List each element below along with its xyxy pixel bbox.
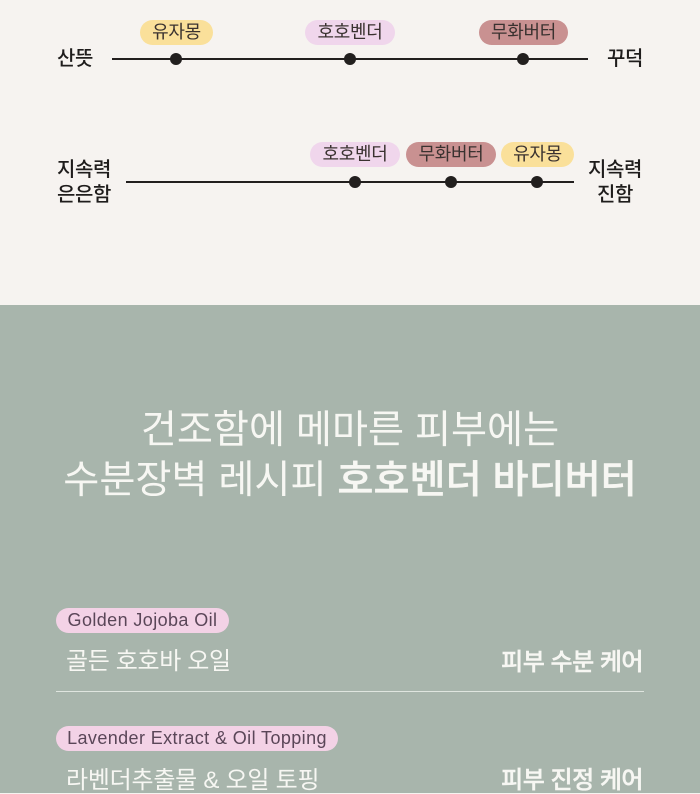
pill: yuja: 유자몽 [152, 22, 201, 42]
label: subtle longevity [57, 159, 111, 206]
tag [56, 608, 229, 633]
panel: scale charts [0, 0, 700, 305]
marker: fig [517, 53, 529, 65]
marker: lavender [349, 176, 361, 188]
tag: Lavender Extract & Oil Topping [67, 728, 327, 748]
pill: lavender: 호호벤더 [322, 144, 388, 164]
pill: yuja [501, 142, 574, 167]
pill: fig: 무화버터 [491, 22, 556, 42]
pill: lavender: 호호벤더 [317, 22, 383, 42]
pill: yuja: 유자몽 [513, 144, 562, 164]
label: subtle longevity: 은은함 [57, 184, 111, 206]
marker: yuja [531, 176, 543, 188]
scale: longevity [57, 142, 642, 206]
pill: fig [406, 142, 496, 167]
label: strong longevity: 지속력 [588, 159, 642, 181]
scale line [126, 181, 574, 183]
benefit: 피부 수분 케어 [501, 649, 643, 676]
benefit: 피부 진정 케어 [501, 767, 643, 794]
pill: lavender [310, 142, 400, 167]
scale: light to rich [57, 20, 643, 70]
pill: fig: 무화버터 [418, 144, 484, 164]
panel: jojoba body butter [0, 305, 700, 793]
marker: fig [445, 176, 457, 188]
scale line [112, 58, 588, 60]
label: rich: 꾸덕 [607, 48, 643, 70]
tag: Golden Jojoba Oil [68, 610, 217, 630]
pill: fig [479, 20, 568, 45]
label: strong longevity [588, 159, 642, 206]
marker: lavender [344, 53, 356, 65]
label: light: 산뜻 [57, 48, 93, 70]
marker: yuja [170, 53, 182, 65]
label: subtle longevity: 지속력 [57, 159, 111, 181]
ingredient: lavender extract [56, 726, 643, 794]
pill: yuja [140, 20, 213, 45]
pill: lavender [305, 20, 395, 45]
heading: 건조함에 메마른 피부에는 [141, 409, 559, 452]
label: strong longevity: 진함 [597, 184, 633, 206]
ingredient: golden jojoba oil [56, 608, 644, 692]
ingredient name: 라벤더추출물 & 오일 토핑 [66, 767, 319, 794]
ingredient name: 골든 호호바 오일 [66, 648, 231, 675]
heading: 수분장벽 레시피 호호벤더 바디버터 [63, 459, 637, 502]
heading [63, 409, 637, 502]
